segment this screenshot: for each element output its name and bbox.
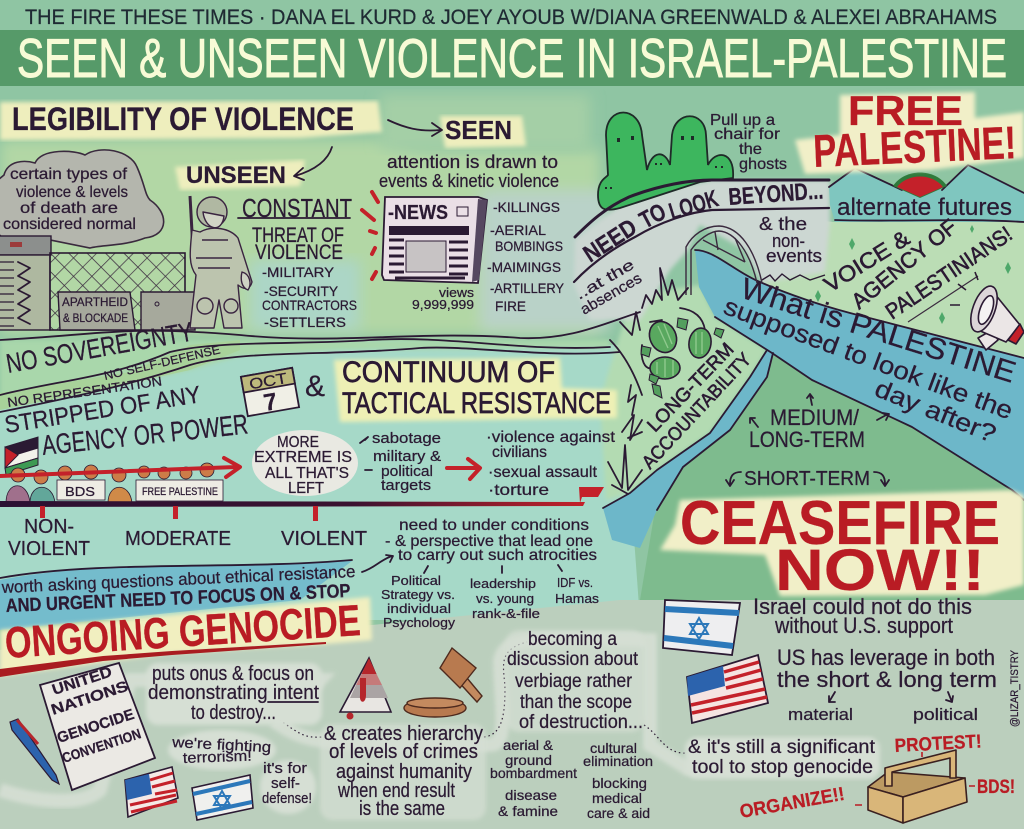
list: sabotage: military &	[373, 448, 441, 465]
list: scope of destruction: & famine	[498, 803, 558, 819]
text: and the non-events: events	[766, 246, 822, 266]
timeline labels: MODERATE	[125, 528, 231, 550]
heading: free palestine	[795, 87, 1024, 177]
heading: ceasefire now	[660, 489, 1024, 603]
text: US leverage: political	[913, 705, 978, 724]
list: atrocities: civilians	[492, 444, 547, 461]
speech: fighting terrorism: we're fighting	[171, 734, 272, 756]
list: atrocities: ·torture	[488, 482, 549, 499]
text: and the non-events	[759, 214, 822, 266]
heading: ongoing genocide: ONGOING GENOCIDE	[3, 596, 362, 668]
text: and the non-events: non-	[772, 231, 805, 251]
text: becoming a discussion: than the scope	[520, 692, 632, 713]
text: views counter: views	[439, 285, 475, 300]
bubble: more extreme	[252, 430, 358, 497]
text: need to understand conditions: to carry out such atrocities	[398, 547, 597, 564]
heading: ongoing genocide	[0, 596, 372, 677]
cloud: normalised violence: violence & levels	[16, 184, 128, 201]
text: stripped of any agency: STRIPPED OF ANY	[3, 381, 203, 439]
credit: artist handle: @LIZAR_TISTRY	[1009, 649, 1021, 727]
text: US leverage: material	[788, 705, 853, 724]
dotted connector path	[0, 638, 690, 801]
text: no sovereignty	[4, 317, 222, 410]
text: puts onus: demonstrating intent	[148, 682, 319, 704]
accountability panel	[600, 285, 767, 500]
text: stripped of any agency: AGENCY OR POWER	[40, 408, 249, 461]
sign: apartheid and blockade: APARTHEID	[62, 295, 128, 309]
text: medium/long-term: MEDIUM/	[770, 405, 860, 430]
speech: self-defense: it's for	[263, 760, 307, 777]
text: US leverage: the short & long term	[777, 667, 997, 692]
road: need to look beyond: BEYOND...	[728, 177, 824, 211]
band: ethical resistance: worth asking questions about ethical resistance	[0, 562, 356, 597]
text: at the absences: absences	[578, 270, 645, 318]
document: UN genocide convention	[40, 663, 155, 790]
icon: gavel	[404, 648, 482, 717]
text: at the absences: ..at the	[572, 256, 637, 303]
arrow: sabotage to atrocity	[447, 459, 480, 479]
text: long-term accountability: LONG-TERM	[643, 339, 738, 436]
timeline labels: NON-	[24, 516, 74, 538]
text: hierarchy of crimes: & creates hierarchy	[324, 723, 483, 745]
text: becoming a discussion: verbiage rather	[515, 671, 633, 692]
text: becoming a discussion	[505, 629, 645, 733]
sign: free palestine: FREE PALESTINE	[142, 486, 218, 498]
list: scope of destruction: ground	[505, 752, 552, 768]
icon: Israeli flag large	[663, 600, 740, 655]
road: need to look beyond: NEED	[579, 214, 642, 268]
list: scope of destruction: blocking	[592, 775, 647, 791]
text: puts onus	[146, 663, 322, 725]
list: scope of destruction: bombardment	[490, 765, 577, 781]
icon: pyramid of crimes	[340, 658, 391, 720]
bubble: more extreme: EXTREME IS	[254, 449, 352, 466]
tensions: three columns: rank-&-file	[472, 606, 540, 621]
text: still a significant tool	[685, 737, 880, 779]
text: and the non-events: & the	[759, 214, 807, 234]
illustration: protesters	[6, 463, 223, 503]
sign: free palestine	[136, 480, 223, 501]
text: hierarchy of crimes	[320, 723, 486, 820]
text: still a significant tool: & it's still a significant	[688, 737, 876, 758]
list: atrocities	[486, 429, 616, 499]
list: seen violence: FIRE	[495, 298, 526, 314]
text: hierarchy of crimes: is the same	[359, 798, 445, 820]
text: voice and agency: VOICE &	[819, 225, 914, 297]
icon: palestinian flag	[5, 437, 38, 475]
tensions: three columns: Strategy vs.	[381, 587, 455, 602]
text: constant threat of violence: -SECURITY	[264, 283, 339, 299]
text: pull up a chair: the	[739, 141, 762, 158]
document: UN genocide convention: GENOCIDE	[55, 706, 136, 747]
text: Israel could not: without U.S. support	[774, 613, 953, 638]
voice panel	[762, 215, 1024, 358]
speech: fighting terrorism: terrorism!	[183, 748, 252, 767]
speech: self-defense	[260, 760, 316, 814]
cloud: normalised violence: certain types of	[10, 166, 128, 183]
text: what is Palestine: day after?	[871, 375, 1000, 449]
heading: seen	[388, 115, 526, 148]
text: becoming a discussion: discussion about	[507, 649, 639, 670]
text: need to understand conditions: need to under conditions	[399, 517, 589, 534]
icon: calendar oct 7	[241, 368, 300, 420]
list: seen violence: -ARTILLERY	[490, 280, 565, 296]
icon: newspaper: -NEWS	[388, 202, 448, 224]
text: hierarchy of crimes: of levels of crimes	[329, 741, 478, 763]
icon: megaphone	[950, 272, 1024, 350]
icon: newspaper	[362, 192, 487, 283]
text: no sovereignty: NO SOVEREIGNTY	[4, 317, 195, 379]
cloud: normalised violence: of death are	[20, 200, 118, 217]
text: at the absences	[572, 256, 645, 318]
list: atrocities: ·violence against	[486, 429, 616, 446]
icon: calendar oct 7: 7	[262, 388, 279, 417]
illustration: watermelons and grass	[608, 268, 724, 494]
text: constant threat of violence: -MILITARY	[262, 264, 335, 280]
icon: US flag large	[687, 655, 768, 723]
tensions: three columns: individual	[387, 601, 451, 616]
list: sabotage: sabotage	[372, 430, 441, 447]
panel: alternate futures	[829, 165, 1024, 222]
heading: unseen	[175, 147, 332, 190]
heading: ceasefire now: NOW!!	[775, 538, 985, 603]
tensions: three columns: IDF vs.	[557, 575, 593, 590]
text: what is Palestine: What is PALESTINE	[737, 272, 1020, 390]
band: ethical resistance	[0, 560, 356, 630]
text: what is Palestine: supposed to look like the	[720, 292, 1016, 425]
text: becoming a discussion: of destruction...	[519, 712, 643, 733]
bubble: more extreme: LEFT	[288, 480, 324, 497]
panel: alternate futures: alternate futures	[837, 194, 1012, 221]
arrow: escalating tactics	[0, 458, 240, 477]
text: medium/long-term: LONG-TERM	[749, 427, 865, 452]
side river	[603, 350, 773, 548]
heading: seen: SEEN	[445, 115, 512, 145]
tensions: three columns: Political	[391, 573, 441, 588]
icon: ghosts	[598, 112, 733, 210]
icon: calendar oct 7: OCT	[248, 370, 288, 393]
bubble: more extreme: MORE	[277, 434, 319, 451]
cloud: normalised violence	[0, 150, 164, 248]
text: still a significant tool: tool to stop genocide	[692, 757, 873, 778]
text: Israel could not: Israel could not do this	[753, 594, 972, 619]
text: attention: events & kinetic violence	[379, 171, 559, 191]
sign: BDS	[57, 480, 105, 500]
cloud: normalised violence: considered normal	[3, 216, 136, 233]
text: constant threat of violence: CONSTANT	[242, 193, 352, 223]
text: pull up a chair: chair for	[714, 126, 781, 143]
text: hierarchy of crimes: when end result	[337, 780, 455, 802]
list: sabotage: political	[381, 463, 433, 480]
icon: Israeli flag small	[192, 775, 253, 820]
text: pull up a chair: Pull up a	[710, 112, 775, 129]
ampersand: &	[305, 370, 325, 403]
text: attention: attention is drawn to	[387, 152, 558, 172]
call to action: protest, BDS, organize	[738, 731, 1015, 823]
document: UN genocide convention: NATIONS	[49, 678, 130, 719]
speech: fighting terrorism	[168, 730, 276, 770]
credits line: THE FIRE THESE TIMES · DANA EL KURD & JOEY AYOUB W/DIANA GREENWALD & ALEXEI ABRAHAMS	[25, 6, 997, 29]
timeline labels	[8, 516, 367, 560]
text: constant threat of violence: -SETTLERS	[264, 314, 346, 330]
icon: pen	[10, 719, 59, 784]
icon: US flag small	[125, 767, 178, 817]
text: US leverage: US has leverage in both	[777, 645, 995, 670]
list: seen violence: -KILLINGS	[493, 199, 560, 215]
list: atrocities: ·sexual assault	[488, 464, 598, 481]
icon: soldier	[190, 196, 252, 328]
text: stripped of any agency	[3, 381, 249, 461]
heading: legibility of violence: LEGIBILITY OF VIOLENCE	[12, 101, 354, 137]
heading: continuum of tactical resistance: CONTINUUM OF	[342, 356, 555, 389]
medium long term green panel	[640, 353, 1024, 600]
heading: continuum of tactical resistance: TACTICAL RESISTANCE	[342, 387, 611, 420]
text: pull up a chair	[710, 112, 787, 173]
heading: continuum of tactical resistance	[334, 356, 617, 422]
list: scope of destruction: disease	[505, 787, 557, 803]
icon: toolbox	[868, 750, 967, 823]
list: seen violence: BOMBINGS	[495, 238, 563, 254]
list: scope of destruction	[490, 737, 653, 821]
list: scope of destruction: cultural	[590, 740, 637, 756]
text: views counter: 9,999,999	[412, 297, 474, 312]
text: need to understand conditions	[362, 517, 597, 573]
sign: apartheid and blockade	[58, 292, 135, 330]
list: sabotage	[360, 430, 441, 494]
list: seen violence	[487, 199, 565, 314]
text: constant threat of violence: THREAT OF	[252, 224, 344, 247]
road: need to look beyond: LOOK	[666, 185, 722, 226]
list: scope of destruction: aerial &	[503, 737, 554, 753]
text: voice and agency	[815, 214, 1017, 324]
timeline labels: VIOLENT	[8, 538, 90, 560]
text: need to understand conditions: - & perspective that lead one	[385, 533, 593, 550]
river	[695, 250, 1024, 500]
text: puts onus: to destroy...	[191, 702, 276, 724]
text: pull up a chair: ghosts	[739, 156, 787, 173]
tensions: three columns: Hamas	[555, 591, 600, 606]
text: what is Palestine	[720, 272, 1020, 449]
text: no sovereignty: NO REPRESENTATION	[6, 373, 163, 410]
list: seen violence: -AERIAL	[490, 222, 546, 238]
text: voice and agency: AGENCY OF	[846, 214, 962, 314]
call to action: protest, BDS, organize: PROTEST!	[894, 731, 982, 757]
gate and fence	[0, 236, 195, 330]
call to action: protest, BDS, organize: ORGANIZE!!	[738, 784, 846, 823]
text: views counter	[412, 285, 475, 312]
list: scope of destruction: care & aid	[587, 805, 650, 821]
list: scope of destruction: elimination	[583, 753, 653, 769]
text: Israel could not	[753, 594, 972, 638]
timeline: continuum	[0, 487, 604, 560]
heading: free palestine: FREE	[848, 87, 963, 134]
timeline labels: VIOLENT	[281, 528, 367, 550]
text: US leverage	[777, 645, 997, 724]
tensions: three columns: vs. young	[476, 591, 534, 606]
road: need to look beyond	[574, 177, 829, 282]
text: medium/long-term	[749, 394, 889, 452]
icon: bridge arch	[686, 226, 825, 295]
road: need to look beyond: TO	[635, 198, 671, 234]
call to action: protest, BDS, organize: BDS!	[977, 777, 1015, 798]
heading: unseen: UNSEEN	[186, 162, 286, 189]
road region	[574, 180, 830, 320]
text: puts onus: puts onus & focus on	[152, 663, 314, 685]
speech: self-defense: defense!	[262, 790, 312, 807]
text: becoming a discussion: becoming a	[528, 629, 617, 650]
list: sabotage: targets	[381, 477, 431, 494]
document: UN genocide convention: UNITED	[50, 663, 114, 699]
document: UN genocide convention: CONVENTION	[60, 725, 143, 766]
list: scope of destruction: medical	[592, 790, 642, 806]
list: seen violence: -MAIMINGS	[487, 259, 561, 275]
tensions: three columns	[381, 573, 600, 630]
sign: apartheid and blockade: & BLOCKADE	[63, 311, 128, 325]
band: ethical resistance: AND URGENT NEED TO FOCUS ON & STOP	[5, 581, 351, 617]
text: constant threat of violence: CONTRACTORS	[262, 297, 357, 313]
text: constant threat of violence	[238, 193, 357, 330]
sign: BDS: BDS	[65, 484, 95, 499]
speech: self-defense: self-	[271, 775, 300, 792]
text: constant threat of violence: VIOLENCE	[255, 241, 343, 264]
right landscape	[0, 180, 1024, 600]
text: short-term: SHORT-TERM	[744, 468, 870, 490]
bubble: more extreme: ALL THAT'S	[265, 465, 349, 482]
text: no sovereignty: NO SELF-DEFENSE	[103, 343, 222, 383]
text: attention	[379, 152, 559, 191]
text: long-term accountability: ACCOUNTABILITY	[638, 349, 756, 473]
tensions: three columns: leadership	[470, 576, 536, 591]
text: hierarchy of crimes: against humanity	[336, 761, 472, 783]
tensions: three columns: Psychology	[383, 615, 456, 630]
